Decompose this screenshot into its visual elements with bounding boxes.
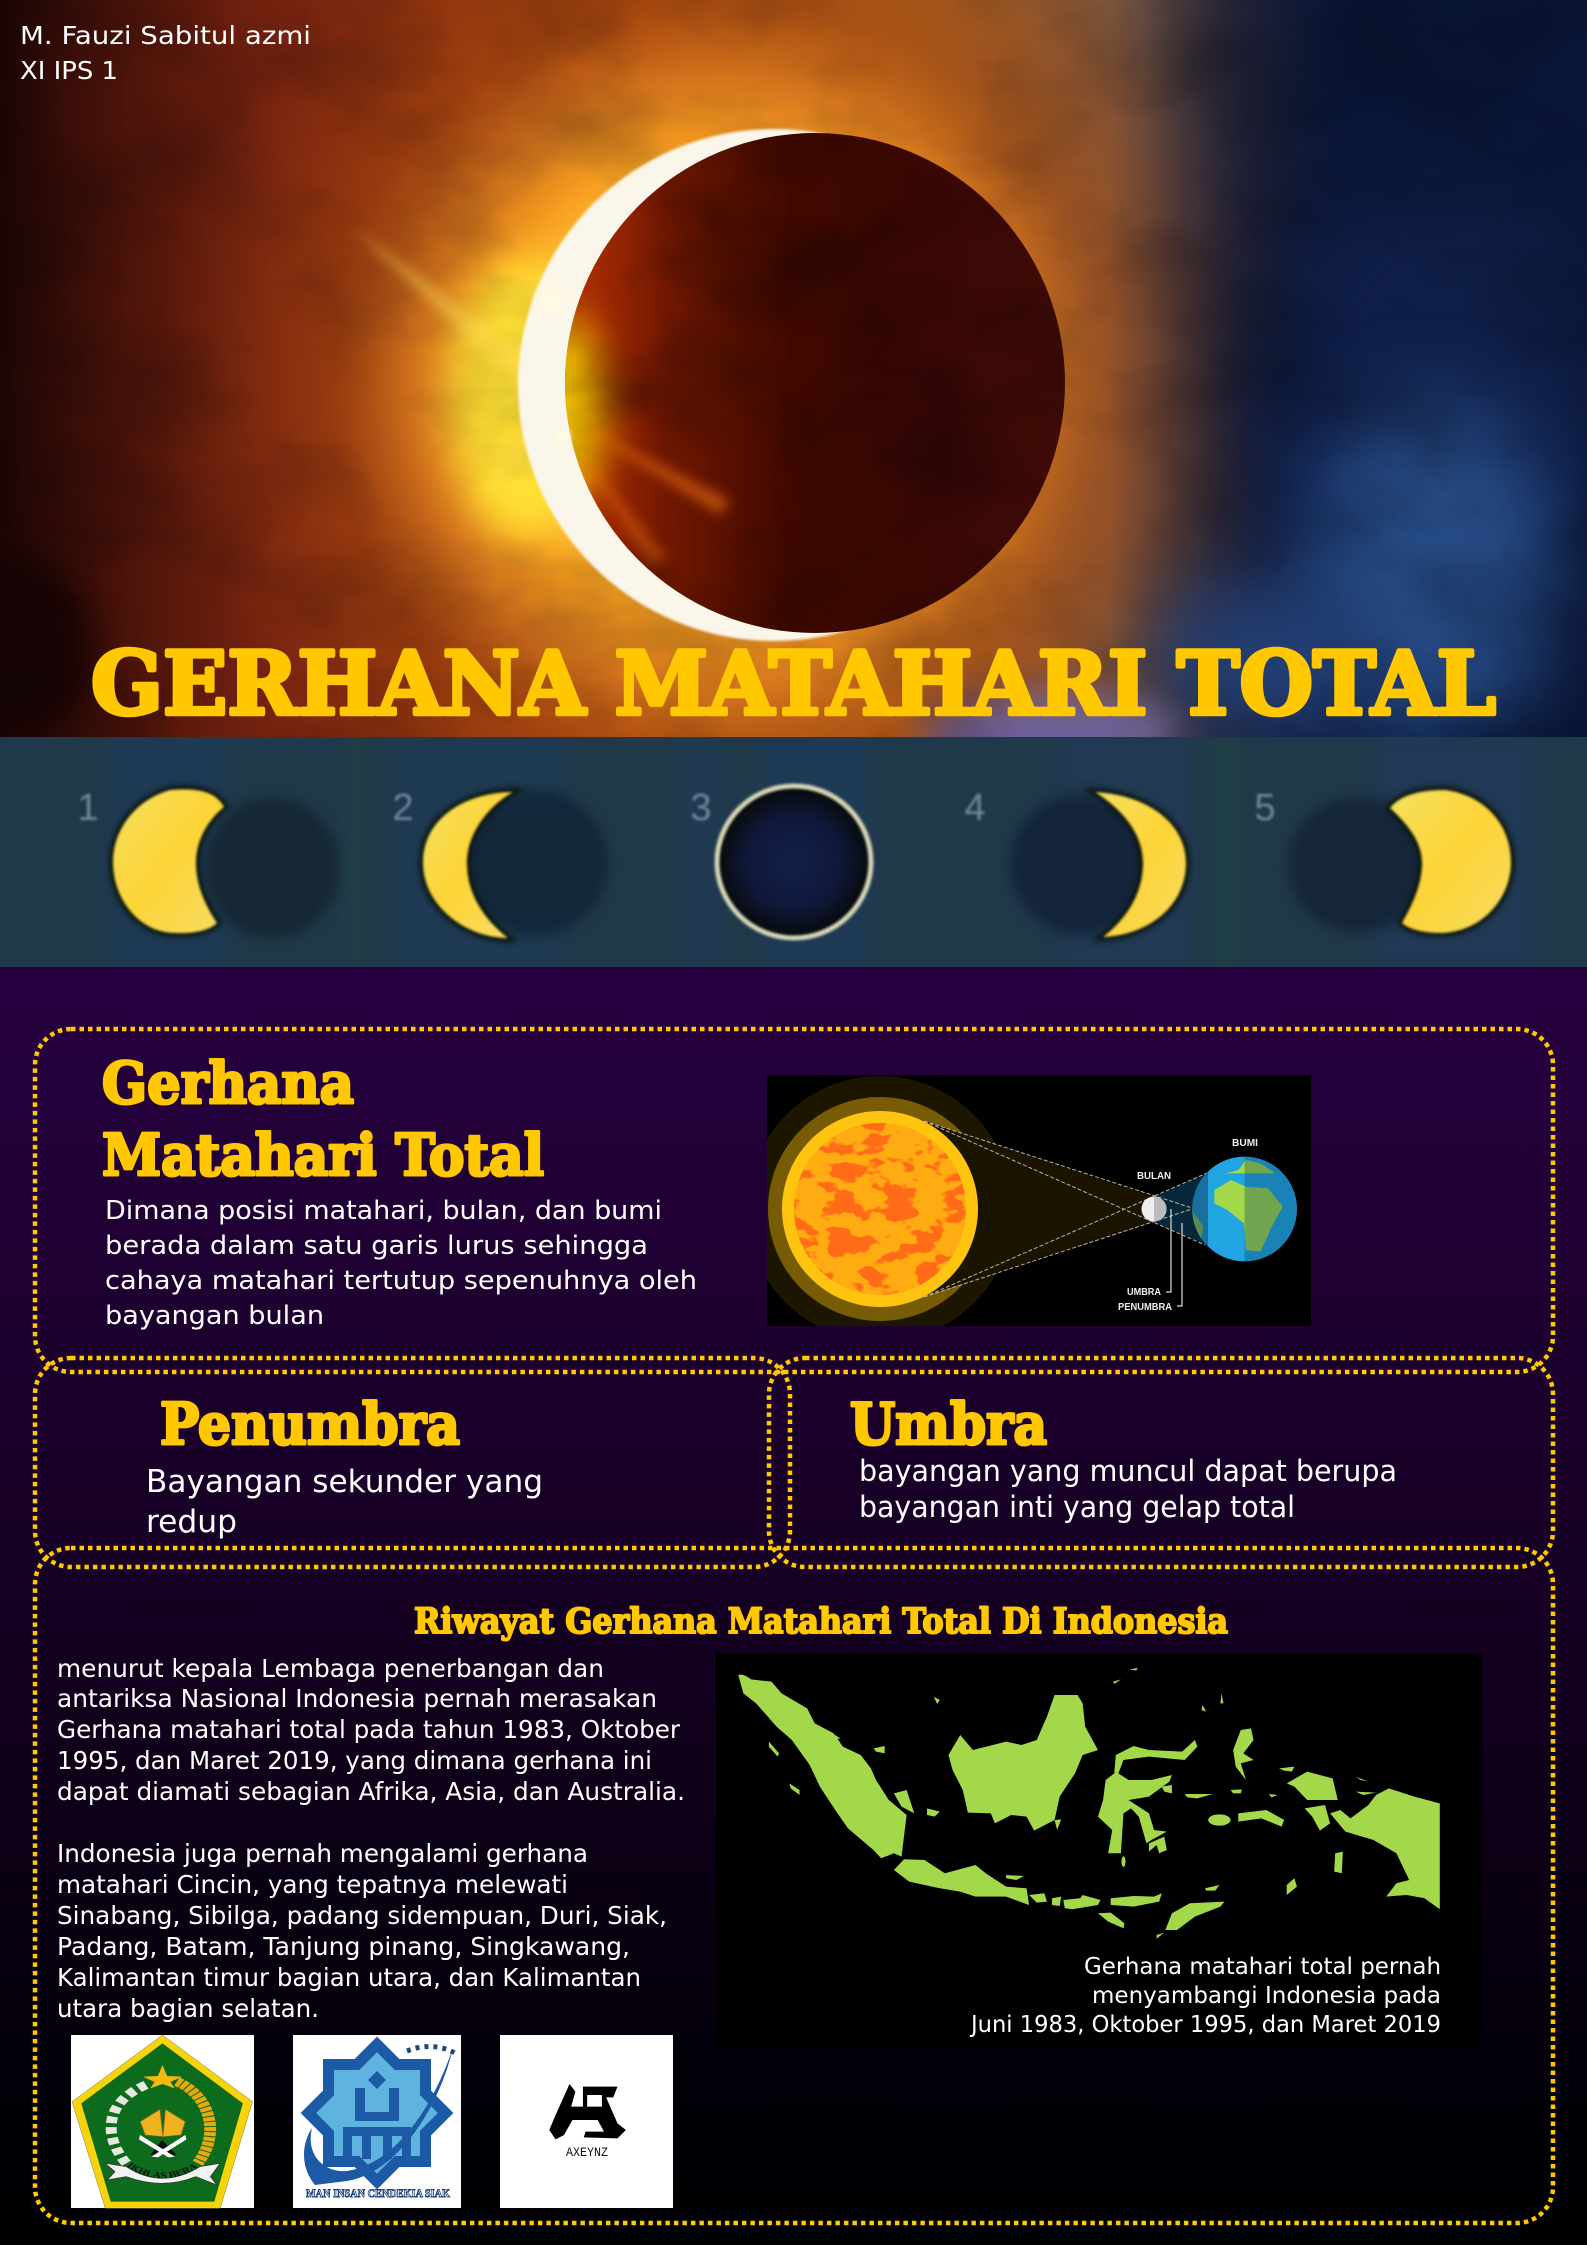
definition text: berada dalam satu garis lurus sehingga [105, 1231, 648, 1261]
earth [1190, 1155, 1300, 1265]
author credit: M. Fauzi Sabitul azmi [20, 21, 311, 50]
diagram: sun, moon and earth alignment [747, 1075, 1311, 1342]
title: GERHANA MATAHARI TOTAL [91, 632, 1496, 735]
logo: Axeynz [500, 2035, 673, 2208]
umbra cone [1154, 1173, 1207, 1245]
definition text: cahaya matahari tertutup sepenuhnya oleh [105, 1266, 697, 1296]
heading: Penumbra: Penumbra [160, 1391, 460, 1458]
logo: Kementerian Agama [71, 2034, 254, 2208]
history text: Sinabang, Sibilga, padang sidempuan, Duri, Siak, [57, 1901, 667, 1930]
heading: Riwayat: Riwayat Gerhana Matahari Total Di Indonesia [414, 1601, 1228, 1642]
history text: menurut kepala Lembaga penerbangan dan [57, 1654, 604, 1683]
logo: Kementerian Agama: IKHLAS BERAMAL [126, 2162, 198, 2178]
history text [57, 1654, 685, 2023]
phase 4: 4 [964, 787, 986, 829]
map caption [969, 1954, 1441, 2038]
logo: Axeynz: AXEYNZ [566, 2145, 608, 2160]
panel: eclipse history in Indonesia [32, 1546, 1556, 2226]
map of Indonesia [716, 1653, 1482, 2048]
penumbra text: Bayangan sekunder yang [146, 1464, 543, 1500]
definition text [105, 1196, 697, 1331]
phase 5 [1254, 787, 1511, 933]
logo: MAN Insan Cendekia Siak: MAN INSAN CENDEKIA SIAK [306, 2186, 451, 2200]
hero photo: solar eclipse [0, 0, 1587, 737]
heading: Gerhana Matahari Total [102, 1050, 544, 1189]
penumbra text: redup [146, 1504, 237, 1540]
panel: umbra [769, 1358, 1553, 1567]
phase 2 [392, 787, 608, 938]
logo: MAN Insan Cendekia Siak [293, 2035, 461, 2208]
map caption: Gerhana matahari total pernah [1084, 1954, 1441, 1980]
diagram labels: BUMI [1232, 1138, 1258, 1149]
heading: Umbra: Umbra [850, 1391, 1047, 1458]
author credit: XI IPS 1 [20, 56, 118, 85]
panel: definition of total eclipse [35, 1029, 1553, 1372]
heading: Gerhana Matahari Total: Matahari Total [102, 1122, 544, 1189]
penumbra text [146, 1464, 543, 1540]
history text: dapat diamati sebagian Afrika, Asia, dan Australia. [57, 1777, 685, 1806]
umbra text: bayangan inti yang gelap total [859, 1490, 1295, 1524]
diagram labels [1118, 1138, 1258, 1313]
history text: utara bagian selatan. [57, 1994, 319, 2023]
diagram labels: PENUMBRA [1118, 1302, 1172, 1313]
map caption: menyambangi Indonesia pada [1092, 1983, 1441, 2009]
history text: matahari Cincin, yang tepatnya melewati [57, 1870, 568, 1899]
diagram labels: UMBRA [1127, 1287, 1161, 1298]
phase 4 [964, 787, 1186, 937]
eclipse phases strip [0, 737, 1587, 967]
phase 3: totality ring [690, 786, 872, 938]
history text: Indonesia juga pernah mengalami gerhana [57, 1839, 588, 1868]
umbra text [859, 1454, 1397, 1524]
history text: Kalimantan timur bagian utara, dan Kalimantan [57, 1963, 641, 1992]
diagram labels: BULAN [1137, 1171, 1171, 1182]
diagram leader lines [1166, 1209, 1182, 1306]
author credit [20, 21, 311, 85]
heading: Gerhana Matahari Total: Gerhana [102, 1050, 354, 1117]
definition text: Dimana posisi matahari, bulan, dan bumi [105, 1196, 662, 1226]
history text: 1995, dan Maret 2019, yang dimana gerhana ini [57, 1746, 652, 1775]
moon [1142, 1196, 1166, 1222]
panel: penumbra [35, 1358, 790, 1567]
phase 2: 2 [392, 787, 414, 829]
phase 1 [77, 787, 339, 938]
history text: antariksa Nasional Indonesia pernah merasakan [57, 1684, 657, 1713]
phase 3: totality ring: 3 [690, 787, 712, 829]
map caption: Juni 1983, Oktober 1995, dan Maret 2019 [969, 2012, 1441, 2038]
history text: Padang, Batam, Tanjung pinang, Singkawang, [57, 1932, 630, 1961]
umbra text: bayangan yang muncul dapat berupa [859, 1454, 1397, 1488]
definition text: bayangan bulan [105, 1301, 324, 1331]
phase 1: 1 [77, 787, 99, 829]
history text: Gerhana matahari total pada tahun 1983, Oktober [57, 1715, 681, 1744]
phase 5: 5 [1254, 787, 1276, 829]
